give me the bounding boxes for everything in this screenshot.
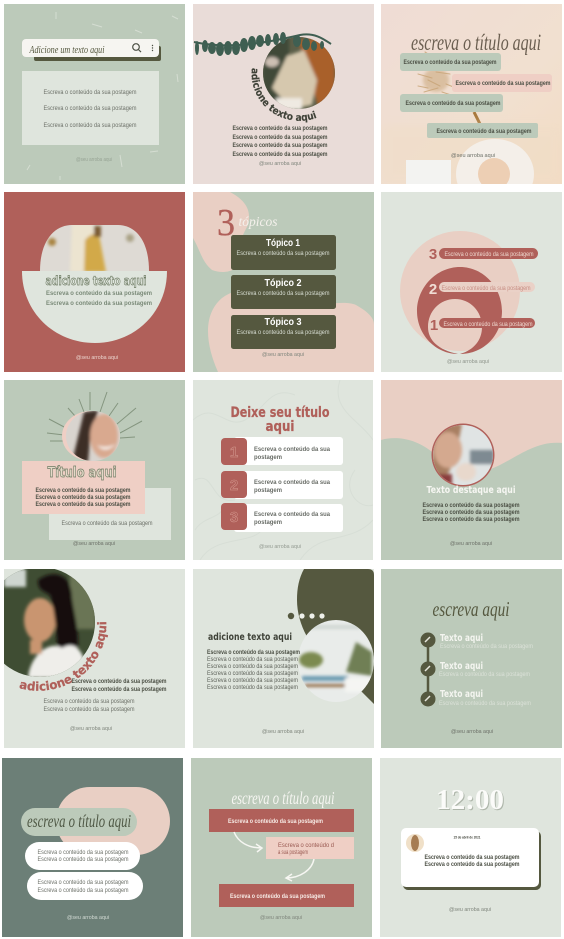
step 2 (420, 661, 530, 678)
content box (22, 71, 159, 145)
clock: 12:00 (436, 784, 504, 816)
text list: Escreva o conteúdo da sua postagem (207, 684, 298, 691)
item 3: 3 (429, 246, 437, 263)
pink card: Título aqui (48, 465, 116, 481)
label 4 (427, 123, 538, 138)
item 3 (221, 503, 343, 532)
panel: olive blob with photo (193, 569, 376, 748)
body text: Escreva o conteúdo da sua postagem (422, 502, 520, 509)
panel background (191, 758, 372, 937)
step 3 (420, 689, 531, 707)
body text: Escreva o conteúdo da sua postagem (46, 290, 152, 297)
squiggle pattern (193, 380, 373, 560)
body text: Escreva o conteúdo da sua postagem (422, 516, 520, 523)
regular text: Escreva o conteúdo da sua postagem (44, 698, 134, 705)
panel background (381, 380, 562, 560)
white pill 2 (27, 872, 143, 900)
circular photo (263, 37, 335, 110)
item 1: Escreva o conteúdo da sua postagem (444, 321, 532, 328)
text list: Escreva o conteúdo da sua postagem (207, 677, 298, 684)
pink card (22, 461, 145, 514)
handle: @seu arroba aqui (260, 915, 302, 921)
handle: @seu arroba aqui (447, 359, 489, 365)
circular photo (296, 620, 376, 704)
box 2: a sua postagem (278, 849, 308, 856)
topic 2 (231, 275, 336, 309)
olive shape (297, 569, 374, 704)
handle: @seu arroba aqui (259, 161, 301, 167)
handle: @seu arroba aqui (451, 153, 495, 159)
light card: Escreva o conteúdo da sua postagem (62, 520, 152, 527)
handle: @seu arroba aqui (450, 541, 492, 547)
date: 15 de abril de 2021 (454, 836, 480, 840)
item 1: 1 (230, 444, 238, 461)
item 3: Escreva o conteúdo da sua (254, 511, 330, 518)
body text: Escreva o conteúdo da sua postagem (232, 125, 328, 132)
title pill: escreva o título aqui (27, 811, 131, 831)
bold text: Escreva o conteúdo da sua postagem (72, 678, 167, 685)
item 2: Escreva o conteúdo da sua (254, 479, 330, 486)
panel: pills on slate (2, 758, 183, 937)
photo ring (432, 424, 494, 486)
panel background (193, 569, 374, 748)
title: adicione texto aqui (46, 273, 146, 288)
arrow 1 (234, 832, 262, 852)
item 2: postagem (254, 487, 282, 494)
white pill 1: Escreva o conteúdo da sua postagem (38, 849, 128, 856)
title pill (21, 808, 137, 836)
item 1 (430, 317, 535, 334)
text list (207, 649, 300, 691)
text list: Escreva o conteúdo da sua postagem (207, 656, 298, 663)
panel background (4, 380, 185, 560)
arched photo (38, 224, 152, 272)
step 2: Escreva o conteúdo da sua postagem (439, 671, 530, 678)
panel background (193, 4, 374, 184)
eucalyptus branch (194, 32, 331, 56)
panel: three topics (193, 192, 374, 372)
pink card: Escreva o conteúdo da sua postagem (36, 501, 131, 508)
clock: 12:00 (437, 785, 505, 817)
handle: @seu arroba aqui (73, 541, 115, 547)
sun rays (47, 392, 142, 441)
box 1: Escreva o conteúdo da sua postagem (228, 818, 323, 825)
item 1: postagem (254, 454, 282, 461)
regular text (44, 698, 134, 713)
icon: more dots (152, 45, 153, 51)
photo elements (406, 52, 534, 184)
panel: portrait curved title (4, 569, 185, 748)
item 2: 2 (230, 477, 238, 494)
item 1: 1 (430, 317, 438, 334)
panel: portrait with rays (4, 380, 185, 560)
green wave (381, 438, 562, 560)
panel background (381, 4, 562, 184)
handle: @seu arroba aqui (259, 544, 301, 550)
step 1: Texto aqui (440, 633, 483, 644)
label 2 (452, 74, 552, 92)
portrait ring (62, 411, 120, 461)
box 1 (209, 809, 354, 832)
panel background (193, 192, 374, 372)
content box: Escreva o conteúdo da sua postagem (44, 105, 136, 112)
title word: tópicos (238, 215, 278, 230)
handle: @seu arroba aqui (451, 729, 493, 735)
panel background (381, 192, 562, 372)
message: Escreva o conteúdo da sua postagem (424, 854, 520, 861)
panel background (380, 758, 561, 937)
panel: wave portrait (381, 380, 562, 560)
title numeral: 3 (217, 202, 235, 244)
text list: Escreva o conteúdo da sua postagem (207, 663, 298, 670)
item 2: 2 (429, 281, 437, 298)
content box: Escreva o conteúdo da sua postagem (44, 89, 136, 96)
regular text: Escreva o conteúdo da sua postagem (44, 706, 134, 713)
title: escreva aqui (432, 597, 510, 621)
white pill 1 (25, 842, 140, 870)
handle: @seu arroba aqui (449, 907, 491, 913)
panel: notification clock (380, 758, 561, 937)
body text (422, 502, 520, 523)
item 2 (221, 471, 343, 499)
item 3: Escreva o conteúdo da sua postagem (444, 251, 534, 258)
bold text (72, 678, 167, 693)
handle: @seu arroba aqui (262, 729, 304, 735)
box 2 (266, 837, 354, 859)
pink stadium (56, 787, 170, 855)
step 1 (420, 632, 533, 650)
curved title: adicione texto aqui (252, 68, 316, 123)
item 3: 3 (230, 509, 238, 526)
dots (288, 613, 325, 619)
panel: timeline (381, 569, 562, 748)
pink card: Escreva o conteúdo da sua postagem (36, 494, 131, 501)
body text (232, 125, 328, 158)
panel background (381, 569, 562, 748)
handle: @seu arroba aqui (262, 352, 304, 358)
handle: @seu arroba aqui (76, 157, 112, 163)
pink card: Escreva o conteúdo da sua postagem (36, 487, 131, 494)
body text: Escreva o conteúdo da sua postagem (46, 300, 152, 307)
notification card: Escreva o conteúdo da sua postagem (424, 861, 520, 868)
notification card (401, 828, 541, 890)
title: Deixe seu título (230, 405, 330, 421)
panel: terracotta bowl post (4, 192, 185, 372)
item 1 (221, 437, 343, 465)
item 3: postagem (254, 519, 282, 526)
body text: Escreva o conteúdo da sua postagem (422, 509, 520, 516)
topic 3: Tópico 3 (264, 317, 302, 328)
step 3: Texto aqui (440, 689, 483, 700)
panel background (193, 380, 373, 560)
label 3: Escreva o conteúdo da sua postagem (406, 100, 501, 107)
panel: still life post (381, 4, 562, 184)
topic 2: Tópico 2 (264, 278, 302, 289)
bold text: Escreva o conteúdo da sua postagem (72, 686, 167, 693)
label 1: Escreva o conteúdo da sua postagem (404, 59, 497, 66)
crescent (417, 267, 502, 354)
handle: @seu arroba aqui (70, 726, 112, 732)
icon: magnifier (133, 44, 141, 52)
blobs (193, 192, 374, 372)
topic 1 (231, 235, 336, 270)
photo (432, 424, 494, 486)
label 1 (400, 53, 501, 71)
portrait photo (65, 410, 121, 462)
panel: circle list (381, 192, 562, 372)
box 3: Escreva o conteúdo da sua postagem (230, 893, 325, 900)
item 2 (429, 281, 535, 298)
panel background (2, 758, 183, 937)
panel background (4, 4, 185, 184)
topic 2: Escreva o conteúdo da sua postagem (236, 290, 330, 297)
label 4: Escreva o conteúdo da sua postagem (436, 128, 532, 135)
arrow 2 (286, 859, 314, 881)
item 1: Escreva o conteúdo da sua (254, 446, 330, 453)
step 1: Escreva o conteúdo da sua postagem (440, 643, 533, 650)
step 2: Texto aqui (440, 661, 483, 672)
panel background (4, 569, 185, 748)
topic 1: Tópico 1 (266, 238, 300, 249)
panel: numbered list (193, 380, 373, 560)
text list: Escreva o conteúdo da sua postagem (207, 649, 300, 656)
body text: Escreva o conteúdo da sua postagem (232, 151, 328, 158)
curved title: adicione texto aqui (20, 622, 108, 691)
pink circle (400, 231, 520, 351)
circular portrait (0, 566, 96, 678)
title (230, 405, 330, 435)
avatar (406, 834, 424, 852)
panel: eucalyptus post (193, 4, 374, 184)
timeline line (427, 640, 429, 699)
text list: Escreva o conteúdo da sua postagem (207, 670, 298, 677)
panel: search bar post (4, 4, 185, 184)
step 3: Escreva o conteúdo da sua postagem (439, 700, 531, 707)
box 2: Escreva o conteúdo d (278, 842, 334, 849)
highlight text: Texto destaque aqui (426, 485, 516, 496)
topic 3: Escreva o conteúdo da sua postagem (236, 329, 330, 336)
white pill 1: Escreva o conteúdo da sua postagem (38, 856, 128, 863)
box 3 (219, 884, 354, 907)
title: escreva o título aqui (232, 788, 334, 808)
content box: Escreva o conteúdo da sua postagem (44, 122, 136, 129)
handle: @seu arroba aqui (76, 355, 118, 361)
white pill 2: Escreva o conteúdo da sua postagem (38, 879, 128, 886)
search bar label: Adicione um texto aqui (29, 45, 105, 56)
topic 3 (231, 315, 336, 349)
search bar (22, 39, 161, 61)
body text: Escreva o conteúdo da sua postagem (232, 134, 328, 141)
item 2: Escreva o conteúdo da sua postagem (442, 285, 530, 292)
body text (46, 290, 152, 307)
panel background (4, 192, 185, 372)
light card (49, 488, 171, 540)
label 3 (400, 94, 503, 112)
panel: flow with arrows (191, 758, 372, 937)
topic 1: Escreva o conteúdo da sua postagem (236, 250, 330, 257)
decorative specks (27, 12, 178, 180)
handle: @seu arroba aqui (67, 915, 109, 921)
bowl shape (22, 271, 167, 343)
white pill 2: Escreva o conteúdo da sua postagem (38, 887, 128, 894)
title: adicione texto aqui (208, 632, 292, 643)
title: aqui (266, 419, 294, 435)
body text: Escreva o conteúdo da sua postagem (232, 142, 328, 149)
item 3 (429, 246, 538, 263)
